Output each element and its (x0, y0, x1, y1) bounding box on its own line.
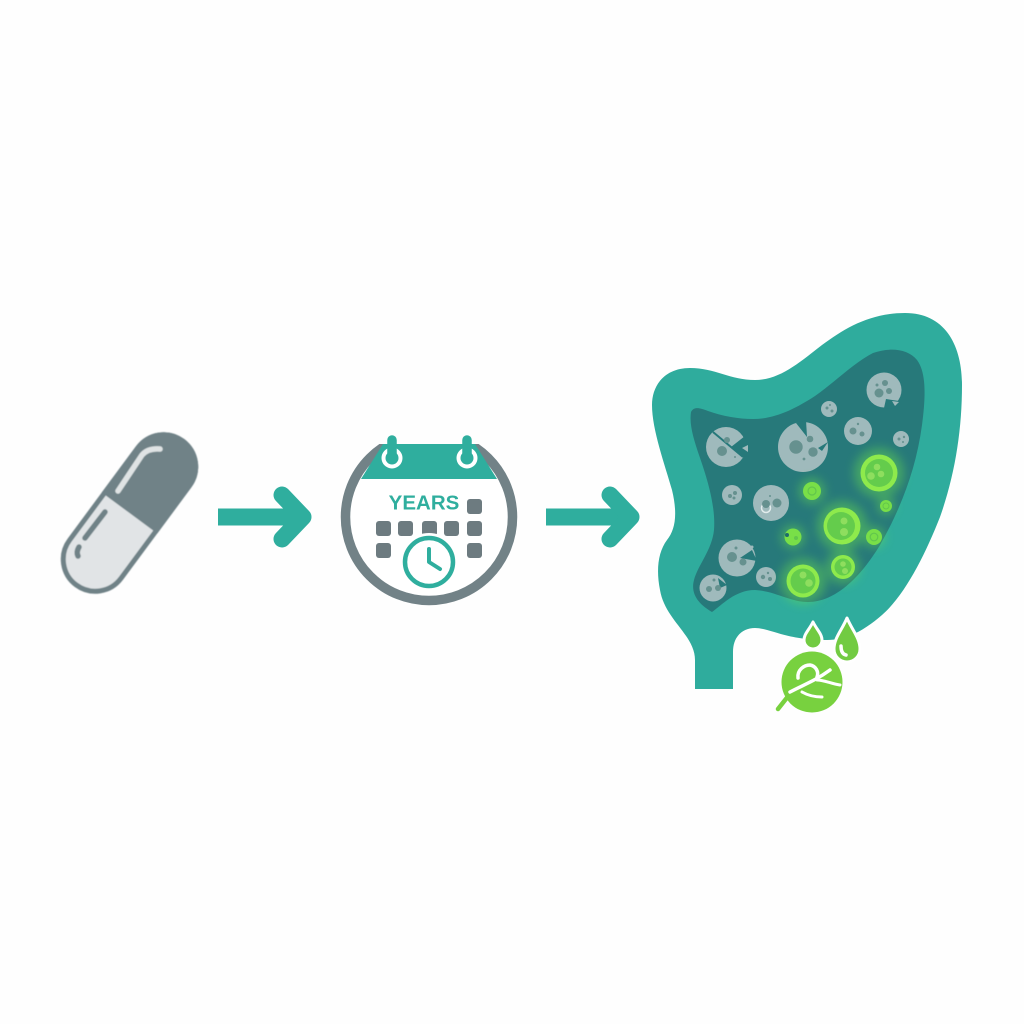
gray microbe cluster: large wedge cells (700, 372, 902, 602)
droplet highlight (841, 646, 846, 655)
large green cells (786, 454, 898, 598)
damaged gray microbes (700, 372, 909, 602)
icon: capsule (60, 431, 199, 594)
calendar day squares (376, 499, 482, 558)
small green cells (784, 482, 892, 546)
arrow: capsule to calendar (218, 495, 303, 539)
gut wall (652, 313, 962, 689)
small droplet (804, 622, 822, 649)
illustration: gut with microbiome (652, 313, 962, 689)
gray microbe cluster: round cells (722, 401, 909, 587)
calendar binding rings (384, 440, 476, 466)
icon: calendar with years label and clock (346, 434, 512, 600)
years label: YEARS (389, 492, 459, 514)
green glow halos (780, 448, 904, 604)
calendar header band (361, 444, 497, 479)
glowing green microbes (780, 448, 904, 604)
gut lumen (691, 350, 925, 612)
arrow: calendar to gut (546, 495, 631, 539)
icon: droplets and leaf badge (778, 618, 860, 712)
clock (400, 533, 458, 591)
leaf badge (778, 652, 842, 712)
infographic canvas (60, 313, 962, 712)
large droplet (834, 618, 860, 662)
